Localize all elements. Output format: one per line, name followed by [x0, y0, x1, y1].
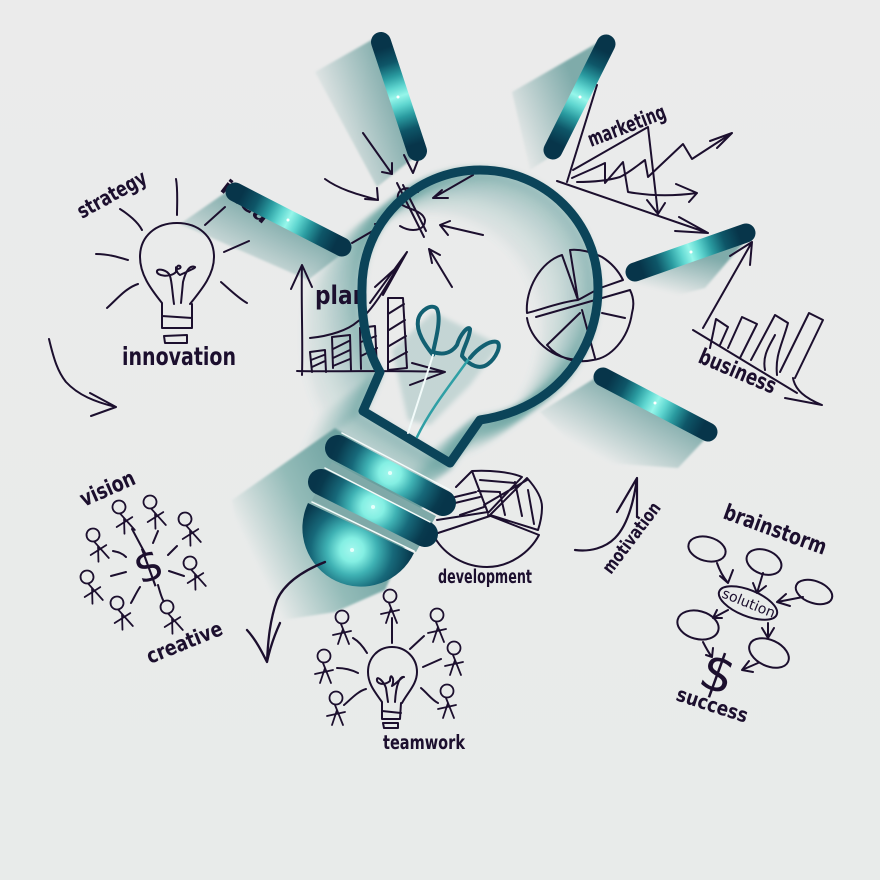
filament loops: [418, 307, 499, 367]
light ray: lower right: [603, 377, 708, 432]
light ray: upper left: [235, 192, 342, 247]
brainstorm diagram: [673, 500, 836, 728]
shadows of light rays: [180, 38, 746, 468]
chart bars: [310, 298, 407, 372]
bulb rays: [96, 179, 249, 308]
people figures: [76, 493, 208, 635]
vision people group: [76, 466, 226, 669]
teamwork sketch: [315, 590, 466, 754]
business bars and axis: [693, 242, 823, 405]
connecting dashes: [111, 529, 184, 603]
dollar sign: $: [692, 640, 743, 708]
arrow: curved down arrow: [247, 562, 325, 662]
base dome: [302, 503, 414, 587]
pie slices: [435, 471, 542, 567]
vision label: vision: [76, 466, 139, 512]
innovation label: innovation: [122, 342, 236, 371]
marketing chart: [557, 85, 732, 233]
base segment top: [338, 448, 443, 503]
flow arrows: [703, 563, 803, 672]
filament stems: [408, 355, 433, 433]
creative label: creative: [143, 616, 226, 669]
brainstorm label: brainstorm: [720, 500, 830, 561]
icon: sketched bulb: [140, 223, 214, 343]
base segment middle: [321, 482, 425, 534]
people figures: [315, 590, 463, 725]
business label: business: [695, 345, 780, 400]
dollar sign: [397, 183, 426, 237]
main bulb outline: [362, 170, 598, 463]
plan bar chart: [291, 252, 445, 385]
dollar sign: $: [127, 538, 170, 595]
connecting lines: [337, 618, 441, 705]
motivation arrow: [575, 478, 666, 578]
band behind segments: [312, 462, 436, 552]
glow centers: [352, 473, 390, 550]
business chart: [693, 242, 823, 405]
base highlights: [312, 433, 450, 551]
strategy label: strategy: [73, 165, 151, 223]
shadow of bulb base: [232, 428, 430, 625]
idea ellipses: [674, 532, 836, 674]
arrows pointing to dollar: [325, 133, 483, 287]
pie chart inside bulb: [527, 250, 633, 361]
marketing label: marketing: [584, 100, 669, 152]
innovation sketch: strategy and bulb: [73, 165, 249, 371]
light ray: right: [635, 233, 746, 272]
arrow: curved left arrow: [49, 339, 116, 416]
chart axes: [291, 265, 445, 385]
filament: [408, 307, 499, 437]
success label: success: [673, 682, 751, 728]
arrow: [575, 478, 637, 550]
bulb base: [302, 433, 450, 587]
marketing axes: [557, 85, 708, 233]
solution label: solution: [720, 586, 777, 622]
dollar sign with converging arrows: [325, 133, 483, 287]
teamwork label: teamwork: [383, 731, 466, 754]
idea label: idea: [216, 175, 275, 228]
shadow of filament: [392, 312, 500, 425]
development label: development: [438, 567, 532, 588]
light ray: top: [381, 42, 417, 151]
light ray: upper right: [553, 44, 606, 150]
chart trend arrows: [310, 252, 407, 338]
plan label: plan: [315, 281, 368, 311]
development pie chart: [435, 471, 542, 588]
small bulb: [368, 647, 417, 728]
shadow of bulb outline: [307, 172, 595, 504]
motivation label: motivation: [598, 498, 666, 578]
marketing lines and arrows: [572, 127, 732, 214]
